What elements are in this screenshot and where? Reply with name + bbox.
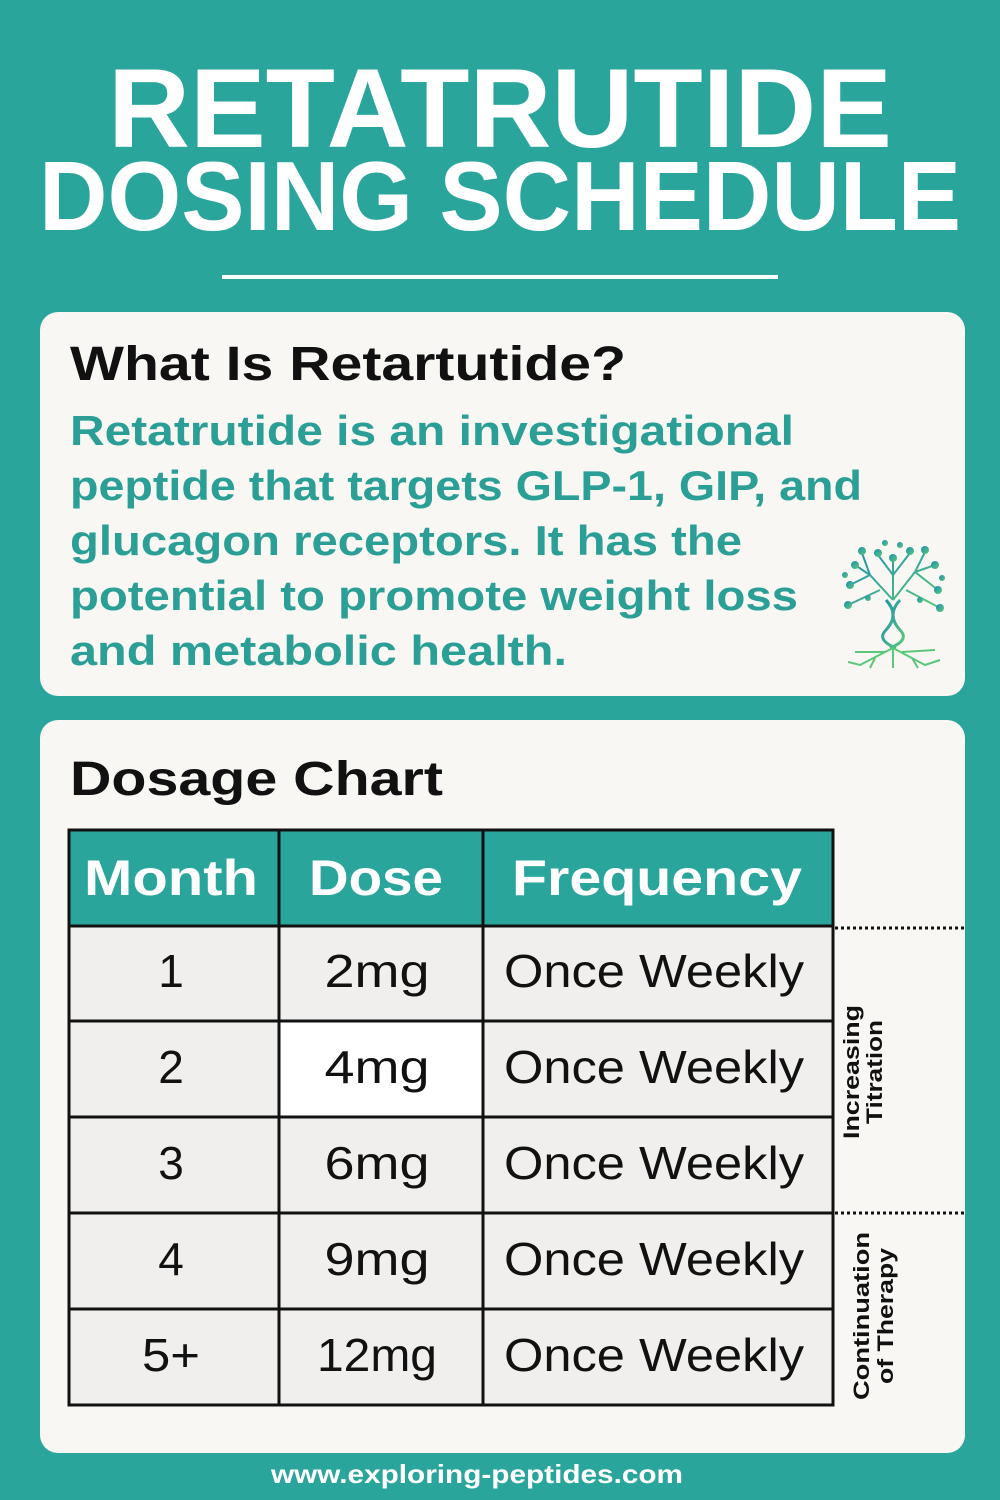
- table rows: 1: [158, 945, 184, 997]
- table rows: Once Weekly: [504, 1329, 804, 1381]
- label: increasing titration: Titration: [862, 1020, 887, 1124]
- label: increasing titration: [839, 1005, 887, 1139]
- title: RETATRUTIDE: [108, 46, 892, 171]
- table rows: 12mg: [317, 1329, 437, 1381]
- table rows: 2: [158, 1041, 184, 1093]
- table rows: 2mg: [324, 945, 430, 997]
- text block: description: [70, 407, 862, 674]
- table rows: [142, 945, 804, 1381]
- panel: what is retatrutide: [40, 312, 965, 696]
- title: DOSING SCHEDULE: [39, 141, 961, 251]
- text block: description: peptide that targets GLP-1, GIP, and: [70, 462, 862, 509]
- table header: Frequency: [512, 850, 802, 906]
- table header: Month: [84, 850, 258, 906]
- table header: [84, 850, 802, 906]
- table rows: Once Weekly: [504, 1137, 804, 1189]
- table rows: 3: [158, 1137, 184, 1189]
- label: continuation of therapy: Continuation: [849, 1232, 874, 1400]
- table rows: Once Weekly: [504, 945, 804, 997]
- title: [39, 46, 961, 251]
- table: [69, 830, 833, 1405]
- table header: Dose: [309, 850, 443, 906]
- table rows: 5+: [142, 1329, 200, 1381]
- text block: description: Retatrutide is an investigational: [70, 407, 794, 454]
- table rows: 4mg: [324, 1041, 430, 1093]
- label: increasing titration: Increasing: [839, 1005, 864, 1139]
- table rows: 9mg: [324, 1233, 430, 1285]
- table rows: Once Weekly: [504, 1041, 804, 1093]
- table rows: Once Weekly: [504, 1233, 804, 1285]
- table rows: 6mg: [324, 1137, 430, 1189]
- heading: dosage chart: Dosage Chart: [70, 753, 443, 806]
- panel: dosage chart: [40, 720, 965, 1453]
- table rows: 4: [158, 1233, 184, 1285]
- icon: DNA tree: [842, 540, 945, 668]
- text block: description: glucagon receptors. It has the: [70, 517, 742, 564]
- text block: description: and metabolic health.: [70, 627, 567, 674]
- label: continuation of therapy: of Therapy: [873, 1247, 898, 1384]
- text block: description: potential to promote weight loss: [70, 572, 798, 619]
- label: continuation of therapy: [849, 1232, 898, 1400]
- footer url: www.exploring-peptides.com: [270, 1459, 683, 1489]
- heading: what is: What Is Retartutide?: [70, 338, 626, 391]
